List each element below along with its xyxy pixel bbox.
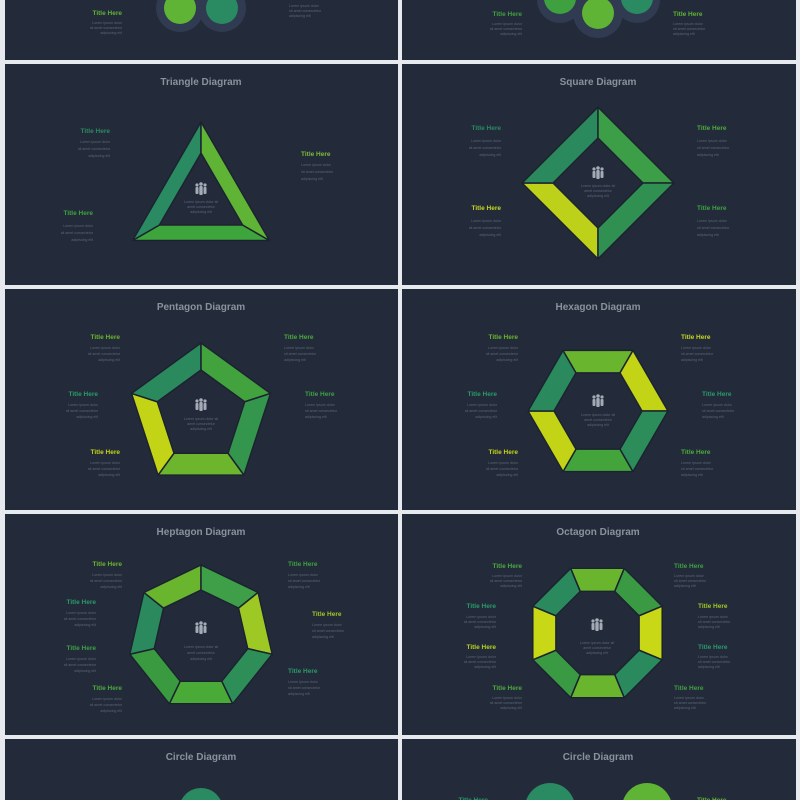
labels: sit amet consectetur bbox=[78, 147, 111, 151]
labels: Lorem ipsum dolor bbox=[471, 139, 502, 143]
labels: sit amet consectetur bbox=[464, 660, 497, 664]
labels: Title Here bbox=[471, 125, 501, 132]
labels: Lorem ipsum dolor bbox=[697, 139, 728, 143]
labels: sit amet consectetur bbox=[288, 579, 321, 583]
label text right: sit amet consectetur bbox=[289, 9, 322, 13]
labels: sit amet consectetur bbox=[88, 467, 121, 471]
labels: Lorem ipsum dolor bbox=[681, 346, 712, 350]
panel: pentagon diagram bbox=[5, 289, 398, 510]
labels: Lorem ipsum dolor bbox=[488, 461, 519, 465]
labels: Title Here bbox=[66, 599, 96, 606]
labels: Lorem ipsum dolor bbox=[697, 219, 728, 223]
labels: Title Here bbox=[66, 645, 96, 652]
labels: adipiscing elit bbox=[674, 706, 696, 710]
label bbox=[90, 10, 123, 35]
labels: Lorem ipsum dolor bbox=[288, 680, 319, 684]
labels: Lorem ipsum dolor bbox=[68, 403, 99, 407]
labels: Title Here bbox=[697, 125, 727, 132]
labels: adipiscing elit bbox=[698, 625, 720, 629]
labels: adipiscing elit bbox=[479, 153, 501, 157]
labels: Title Here bbox=[301, 151, 331, 158]
labels: sit amet consectetur bbox=[486, 352, 519, 356]
labels: Title Here bbox=[92, 685, 122, 692]
labels: adipiscing elit bbox=[100, 709, 122, 713]
labels: sit amet consectetur bbox=[465, 409, 498, 413]
labels: sit amet consectetur bbox=[305, 409, 338, 413]
labels: Title Here bbox=[284, 334, 314, 341]
title: Hexagon Diagram bbox=[555, 302, 641, 313]
labels: Lorem ipsum dolor bbox=[702, 403, 733, 407]
labels: adipiscing elit bbox=[71, 238, 93, 242]
labels: Lorem ipsum dolor bbox=[63, 224, 94, 228]
labels: adipiscing elit bbox=[74, 669, 96, 673]
labels: Lorem ipsum dolor bbox=[674, 574, 705, 578]
pentagon ring bbox=[132, 343, 270, 475]
center icon and text bbox=[581, 166, 615, 198]
center icon and text: amet consectetur bbox=[187, 651, 216, 655]
labels: Lorem ipsum dolor bbox=[66, 657, 97, 661]
labels: sit amet consectetur bbox=[88, 352, 121, 356]
labels: adipiscing elit bbox=[500, 584, 522, 588]
labels: Lorem ipsum dolor bbox=[92, 697, 123, 701]
center icon and text: Lorem ipsum dolor sit bbox=[581, 413, 615, 417]
labels: sit amet consectetur bbox=[469, 226, 502, 230]
labels: sit amet consectetur bbox=[464, 620, 497, 624]
center icon and text: amet consectetur bbox=[584, 189, 613, 193]
label text right: Lorem ipsum dolor bbox=[289, 4, 320, 8]
labels: sit amet consectetur bbox=[90, 579, 123, 583]
labels: Title Here bbox=[466, 644, 496, 651]
labels: adipiscing elit bbox=[697, 233, 719, 237]
labels: Lorem ipsum dolor bbox=[312, 623, 343, 627]
labels: sit amet consectetur bbox=[697, 146, 730, 150]
panel: square diagram bbox=[402, 64, 796, 285]
labels: Lorem ipsum dolor bbox=[681, 461, 712, 465]
title: Pentagon Diagram bbox=[157, 302, 245, 313]
title: Octagon Diagram bbox=[556, 527, 640, 538]
labels bbox=[490, 11, 706, 36]
labels: Title Here bbox=[492, 11, 522, 18]
labels: adipiscing elit bbox=[496, 358, 518, 362]
labels: Title Here bbox=[92, 561, 122, 568]
labels: adipiscing elit bbox=[88, 154, 110, 158]
labels: adipiscing elit bbox=[474, 625, 496, 629]
title: Circle Diagram bbox=[166, 752, 236, 763]
labels: adipiscing elit bbox=[698, 665, 720, 669]
labels: adipiscing elit bbox=[697, 153, 719, 157]
center icon and text: Lorem ipsum dolor sit bbox=[184, 417, 218, 421]
labels: sit amet consectetur bbox=[312, 629, 345, 633]
labels: Lorem ipsum dolor bbox=[492, 22, 523, 26]
panel: heptagon diagram bbox=[5, 514, 398, 735]
circles bbox=[537, 0, 660, 38]
center icon and text: Lorem ipsum dolor sit bbox=[184, 645, 218, 649]
labels: sit amet consectetur bbox=[469, 146, 502, 150]
labels: sit amet consectetur bbox=[681, 352, 714, 356]
circle: green bbox=[156, 0, 204, 32]
labels: Title Here bbox=[702, 391, 732, 398]
center icon and text: adipiscing elit bbox=[587, 423, 609, 427]
title: Heptagon Diagram bbox=[157, 527, 246, 538]
labels: Title Here bbox=[68, 391, 98, 398]
labels: Title Here bbox=[488, 334, 518, 341]
labels: sit amet consectetur bbox=[301, 170, 334, 174]
labels: sit amet consectetur bbox=[681, 467, 714, 471]
label: Title Here bbox=[92, 10, 122, 17]
octagon ring bbox=[533, 568, 662, 698]
labels: adipiscing elit bbox=[74, 623, 96, 627]
labels: Title Here bbox=[305, 391, 335, 398]
labels: Lorem ipsum dolor bbox=[492, 574, 523, 578]
center icon and text: Lorem ipsum dolor sit bbox=[580, 641, 614, 645]
labels: adipiscing elit bbox=[673, 32, 695, 36]
labels: Title Here bbox=[674, 685, 704, 692]
labels: Title Here bbox=[681, 334, 711, 341]
labels: Title Here bbox=[673, 11, 703, 18]
labels bbox=[465, 334, 735, 477]
labels: Title Here bbox=[288, 668, 318, 675]
panel: hexagon diagram bbox=[402, 289, 796, 510]
center icon and text: amet consectetur bbox=[187, 205, 216, 209]
labels: adipiscing elit bbox=[288, 585, 310, 589]
labels: sit amet consectetur bbox=[490, 701, 523, 705]
labels: sit amet consectetur bbox=[674, 701, 707, 705]
center icon and text: adipiscing elit bbox=[190, 210, 212, 214]
labels bbox=[66, 334, 338, 477]
label: adipiscing elit bbox=[100, 31, 122, 35]
center icon and text bbox=[184, 621, 218, 661]
labels: sit amet consectetur bbox=[288, 686, 321, 690]
labels: adipiscing elit bbox=[98, 358, 120, 362]
center icon and text: adipiscing elit bbox=[190, 427, 212, 431]
labels: sit amet consectetur bbox=[490, 579, 523, 583]
square ring bbox=[522, 107, 674, 259]
labels: Lorem ipsum dolor bbox=[92, 573, 123, 577]
center icon and text bbox=[580, 618, 614, 655]
labels: Title Here bbox=[492, 685, 522, 692]
labels: Title Here bbox=[312, 611, 342, 618]
labels: sit amet consectetur bbox=[674, 579, 707, 583]
panel: circle diagram right bbox=[402, 739, 796, 800]
center icon and text: Lorem ipsum dolor sit bbox=[581, 184, 615, 188]
center icon and text: amet consectetur bbox=[584, 418, 613, 422]
labels: Lorem ipsum dolor bbox=[698, 615, 729, 619]
label: Lorem ipsum dolor bbox=[92, 21, 123, 25]
labels: adipiscing elit bbox=[312, 635, 334, 639]
labels: adipiscing elit bbox=[301, 177, 323, 181]
labels: Title Here bbox=[63, 210, 93, 217]
labels: sit amet consectetur bbox=[284, 352, 317, 356]
circle: teal bbox=[198, 0, 246, 32]
labels bbox=[464, 563, 731, 710]
panel: octagon diagram bbox=[402, 514, 796, 735]
labels: Lorem ipsum dolor bbox=[488, 346, 519, 350]
labels: Title Here bbox=[90, 334, 120, 341]
labels: adipiscing elit bbox=[702, 415, 724, 419]
title: Square Diagram bbox=[560, 77, 636, 88]
labels: adipiscing elit bbox=[681, 473, 703, 477]
labels: sit amet consectetur bbox=[64, 663, 97, 667]
labels: Lorem ipsum dolor bbox=[466, 655, 497, 659]
label: sit amet consectetur bbox=[90, 26, 123, 30]
labels: Lorem ipsum dolor bbox=[80, 140, 111, 144]
labels: Lorem ipsum dolor bbox=[66, 611, 97, 615]
labels: Lorem ipsum dolor bbox=[90, 461, 121, 465]
labels: sit amet consectetur bbox=[673, 27, 706, 31]
labels: Title Here bbox=[90, 449, 120, 456]
labels: sit amet consectetur bbox=[90, 703, 123, 707]
labels: sit amet consectetur bbox=[702, 409, 735, 413]
panel: circle diagram left bbox=[5, 739, 398, 800]
circle bbox=[179, 788, 223, 800]
labels: Lorem ipsum dolor bbox=[471, 219, 502, 223]
labels: sit amet consectetur bbox=[486, 467, 519, 471]
labels: Lorem ipsum dolor bbox=[284, 346, 315, 350]
center icon and text bbox=[581, 394, 615, 427]
hexagon ring bbox=[528, 350, 668, 472]
labels: Title Here bbox=[698, 644, 728, 651]
labels: adipiscing elit bbox=[474, 665, 496, 669]
center icon and text: adipiscing elit bbox=[190, 657, 212, 661]
labels bbox=[61, 128, 334, 242]
labels: adipiscing elit bbox=[496, 473, 518, 477]
labels: Lorem ipsum dolor bbox=[288, 573, 319, 577]
center icon and text: Lorem ipsum dolor sit bbox=[184, 200, 218, 204]
labels: sit amet consectetur bbox=[66, 409, 99, 413]
labels: sit amet consectetur bbox=[698, 620, 731, 624]
labels: adipiscing elit bbox=[98, 473, 120, 477]
labels: Lorem ipsum dolor bbox=[90, 346, 121, 350]
labels: Lorem ipsum dolor bbox=[698, 655, 729, 659]
labels: Lorem ipsum dolor bbox=[673, 22, 704, 26]
title: Circle Diagram bbox=[563, 752, 633, 763]
labels: adipiscing elit bbox=[288, 692, 310, 696]
center icon and text: adipiscing elit bbox=[586, 651, 608, 655]
labels: Title Here bbox=[488, 449, 518, 456]
labels: Title Here bbox=[681, 449, 711, 456]
labels: sit amet consectetur bbox=[64, 617, 97, 621]
labels: adipiscing elit bbox=[681, 358, 703, 362]
triangle ring bbox=[133, 122, 269, 248]
label text right bbox=[289, 4, 322, 18]
labels: Title Here bbox=[466, 603, 496, 610]
labels: Title Here bbox=[467, 391, 497, 398]
slide: top-right partial bbox=[402, 0, 796, 60]
labels bbox=[469, 125, 730, 237]
center icon and text bbox=[184, 182, 218, 214]
title: Triangle Diagram bbox=[160, 77, 242, 88]
center icon and text: amet consectetur bbox=[187, 422, 216, 426]
circles bbox=[525, 783, 672, 800]
labels: Lorem ipsum dolor bbox=[492, 696, 523, 700]
center icon and text bbox=[184, 398, 218, 431]
labels: adipiscing elit bbox=[76, 415, 98, 419]
labels: adipiscing elit bbox=[284, 358, 306, 362]
labels: Lorem ipsum dolor bbox=[305, 403, 336, 407]
labels: sit amet consectetur bbox=[61, 231, 94, 235]
labels: adipiscing elit bbox=[500, 32, 522, 36]
partial labels bbox=[458, 797, 727, 800]
labels: adipiscing elit bbox=[674, 584, 696, 588]
heptagon ring bbox=[130, 565, 272, 704]
labels: Title Here bbox=[492, 563, 522, 570]
labels: Lorem ipsum dolor bbox=[466, 615, 497, 619]
labels: Title Here bbox=[80, 128, 110, 135]
panel: triangle diagram bbox=[5, 64, 398, 285]
labels: sit amet consectetur bbox=[698, 660, 731, 664]
labels: Lorem ipsum dolor bbox=[674, 696, 705, 700]
labels: sit amet consectetur bbox=[697, 226, 730, 230]
center icon and text: amet consectetur bbox=[583, 646, 612, 650]
labels: Title Here bbox=[697, 205, 727, 212]
labels: sit amet consectetur bbox=[490, 27, 523, 31]
labels: adipiscing elit bbox=[305, 415, 327, 419]
labels: Title Here bbox=[698, 603, 728, 610]
labels: Title Here bbox=[674, 563, 704, 570]
label text right: adipiscing elit bbox=[289, 14, 311, 18]
labels: Title Here bbox=[471, 205, 501, 212]
labels bbox=[64, 561, 345, 713]
slide: top-left partial bbox=[5, 0, 398, 60]
labels: Lorem ipsum dolor bbox=[301, 163, 332, 167]
labels: Lorem ipsum dolor bbox=[467, 403, 498, 407]
labels: adipiscing elit bbox=[500, 706, 522, 710]
center icon and text: adipiscing elit bbox=[587, 194, 609, 198]
labels: adipiscing elit bbox=[100, 585, 122, 589]
labels: adipiscing elit bbox=[479, 233, 501, 237]
labels: Title Here bbox=[288, 561, 318, 568]
labels: adipiscing elit bbox=[475, 415, 497, 419]
